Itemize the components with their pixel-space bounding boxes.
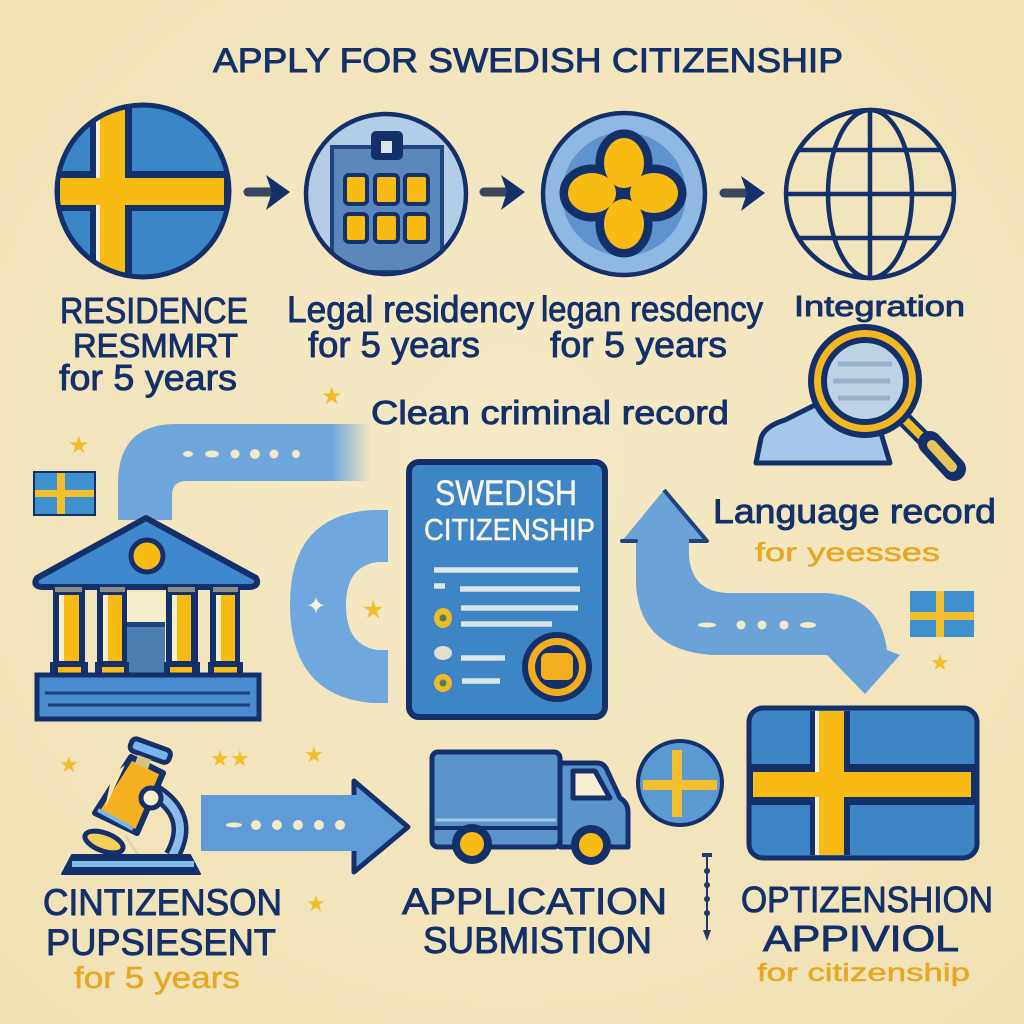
arrow 1	[248, 175, 290, 210]
divider pin	[702, 853, 712, 941]
label: optizenshion approval: APPIVIOL	[763, 918, 959, 959]
arrow: right arrow	[201, 781, 408, 872]
arrow: curved right	[622, 490, 900, 694]
stars bottom left: ★	[210, 746, 230, 771]
label: legal residency: for 5 years	[308, 324, 480, 365]
title: APPLY FOR SWEDISH CITIZENSHIP	[213, 42, 843, 80]
stars bottom left: ★	[304, 742, 324, 767]
arrow: C shape: ✦	[306, 593, 326, 620]
icon: calendar circle	[306, 114, 466, 274]
label: clean criminal record: Clean criminal record	[371, 394, 729, 431]
stars bottom left: ★	[306, 891, 326, 916]
label: legal residency: Legal residency	[287, 289, 534, 330]
label: citizenson: PUPSIESENT	[46, 922, 276, 963]
label: legan residency: legan resdency	[541, 290, 763, 329]
smudge	[648, 684, 716, 688]
label: for years: for yeesses	[755, 537, 940, 567]
label: residence	[59, 290, 248, 398]
checklist lines	[434, 570, 580, 681]
gold smudge	[474, 974, 590, 980]
label: residence: for 5 years	[59, 357, 237, 398]
icon: large flag	[749, 708, 977, 858]
arrow 3	[724, 176, 765, 211]
heading: swedish citizenship: CITIZENSHIP	[424, 512, 595, 547]
small flag left	[34, 472, 95, 515]
icon: flag circle	[55, 100, 235, 280]
label: optizenshion approval	[741, 879, 993, 987]
panel: citizenship document	[409, 462, 605, 717]
icon: government building	[35, 518, 259, 719]
label: language record: Language record	[713, 493, 996, 531]
stars top left: ★	[68, 432, 90, 459]
label: residence: RESMMRT	[73, 327, 238, 364]
label: citizenson: for 5 years	[74, 960, 240, 995]
arrow: C shape	[290, 510, 388, 703]
heading: swedish citizenship: SWEDISH	[435, 474, 577, 513]
heading: swedish citizenship	[424, 474, 595, 547]
arrow 2	[484, 175, 525, 210]
label: optizenshion approval: OPTIZENSHION	[741, 879, 993, 920]
label: application submission	[402, 881, 667, 961]
label: citizenson: CINTIZENSON	[43, 882, 282, 923]
label: citizenson	[43, 882, 282, 995]
arrow: curved top-left	[118, 424, 372, 520]
icon: small flag circle	[638, 741, 722, 825]
icon: microscope	[62, 738, 200, 874]
label: legan residency	[541, 290, 763, 365]
seal	[522, 632, 592, 702]
label: legan residency: for 5 years	[550, 324, 727, 365]
icon: globe	[786, 110, 954, 278]
icon: delivery truck	[432, 752, 628, 861]
star right: ★	[930, 650, 950, 675]
stars bottom left: ★	[59, 752, 79, 777]
label: integration: Integration	[794, 291, 965, 323]
label: legal residency	[287, 289, 534, 365]
stars bottom left: ★	[230, 746, 250, 771]
checklist bullets	[434, 608, 452, 692]
icon: magnifier over person	[756, 327, 954, 469]
small flag right	[910, 591, 974, 637]
stars top left	[68, 383, 343, 459]
label: residence: RESIDENCE	[60, 290, 248, 331]
stars bottom left	[59, 742, 326, 916]
label: optizenshion approval: for citizenship	[757, 959, 970, 987]
label: application submission: APPLICATION	[402, 881, 667, 922]
stars top left: ★	[321, 383, 343, 410]
label: application submission: SUBMISTION	[423, 920, 652, 961]
icon: flower circle	[543, 113, 705, 275]
arrow: C shape: ★	[362, 596, 384, 624]
